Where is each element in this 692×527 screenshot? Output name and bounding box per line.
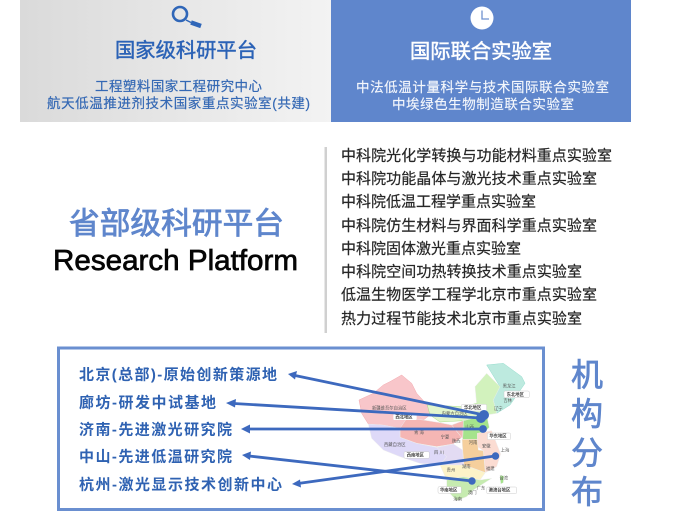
text: provincial lab list: 中科院光化学转换与功能材料重点实验室 [341, 146, 612, 164]
map of China: 新疆维吾尔自治区 [372, 404, 407, 411]
text: provincial lab list: 中科院低温工程学重点实验室 [341, 192, 536, 210]
heading: institution distribution: 分 [571, 435, 603, 471]
map of China: 西藏自治区 [384, 441, 406, 448]
map of China: 辽宁 [494, 405, 503, 412]
heading: international labs: 国际联合实验室 [410, 40, 552, 63]
map of China: 贵州 [447, 467, 455, 474]
map of China: 华南地区 [440, 487, 458, 494]
text: provincial lab list: 中科院固体激光重点实验室 [341, 240, 521, 258]
text: provincial lab list [341, 146, 612, 328]
text: national platform list [47, 78, 310, 111]
map of China: 四 川 [434, 450, 444, 455]
heading: Research Platform: Research Platform [53, 245, 298, 277]
location labels: 杭州-激光显示技术创新中心 [79, 476, 282, 494]
heading: institution distribution: 构 [571, 396, 603, 432]
map of China: 上海 [501, 447, 510, 454]
text: provincial lab list: 低温生物医学工程学北京市重点实验室 [341, 286, 597, 304]
divider rule [324, 147, 327, 333]
map of China: 广东 [477, 484, 486, 491]
arrow: Langfang [226, 399, 486, 423]
heading: provincial platforms: 省部级科研平台 [69, 207, 284, 241]
arrow: Zhongshan [242, 452, 476, 485]
location labels: 中山-先进低温研究院 [79, 448, 232, 466]
panel: international labs [331, 0, 631, 122]
map of China: 台湾 [499, 474, 509, 481]
map of China: 河南 [469, 439, 478, 445]
heading: national platforms: 国家级科研平台 [115, 39, 257, 62]
text: international lab list [356, 79, 609, 112]
map of China: 宁夏 [441, 433, 450, 439]
map of China: 华东地区 [489, 433, 507, 440]
map of China: 西北地区 [395, 414, 413, 421]
icon: magnifier [173, 7, 201, 26]
icon: clock [470, 6, 494, 30]
map of China: 海南 [453, 496, 463, 503]
text: national platform list: 工程塑料国家工程研究中心 [95, 78, 262, 94]
location labels [79, 366, 282, 494]
text: international lab list: 中法低温计量科学与技术国际联合实验室 [356, 79, 609, 95]
map of China: 福建 [486, 465, 495, 472]
text: provincial lab list: 热力过程节能技术北京市重点实验室 [341, 310, 582, 328]
location labels: 廊坊-研发中试基地 [79, 394, 216, 412]
location labels: 济南-先进激光研究院 [79, 420, 232, 438]
map of China: 黑龙江 [503, 382, 516, 389]
heading: institution distribution: 机 [571, 357, 603, 393]
map of China: 澳门 [468, 489, 477, 496]
map of China: 吉林 [503, 397, 513, 404]
heading: institution distribution [571, 357, 603, 510]
text: provincial lab list: 中科院仿生材料与界面科学重点实验室 [341, 216, 597, 234]
map of China: 青 海 [414, 429, 425, 436]
map of China [359, 363, 529, 503]
text: international lab list: 中埃绿色生物制造联合实验室 [392, 96, 574, 112]
map of China: 山西 [465, 424, 475, 431]
map of China: 华北地区 [464, 404, 482, 411]
text: national platform list: 航天低温推进剂技术国家重点实验室(共建) [47, 95, 310, 111]
text: provincial lab list: 中科院功能晶体与激光技术重点实验室 [341, 170, 597, 188]
panel: national platforms [20, 0, 331, 122]
panel: institution distribution [58, 348, 544, 510]
location labels: 北京(总部)-原始创新策源地 [79, 366, 277, 384]
map of China: 港澳台地区 [489, 487, 511, 494]
map of China: 陕西 [452, 438, 461, 445]
arrow: Hangzhou [292, 452, 499, 488]
map of China: 湖南 [462, 463, 471, 470]
heading: institution distribution: 布 [571, 474, 603, 510]
map of China: 东北地区 [507, 391, 525, 398]
arrows: location pointers [226, 371, 499, 488]
map of China: 内蒙古自治区 [442, 410, 468, 417]
map of China: 西南地区 [407, 452, 425, 459]
map of China: 安徽 [482, 442, 491, 449]
arrow: Beijing [288, 371, 489, 420]
arrow: Jinan [241, 424, 487, 434]
text: provincial lab list: 中科院空间功热转换技术重点实验室 [341, 262, 582, 280]
